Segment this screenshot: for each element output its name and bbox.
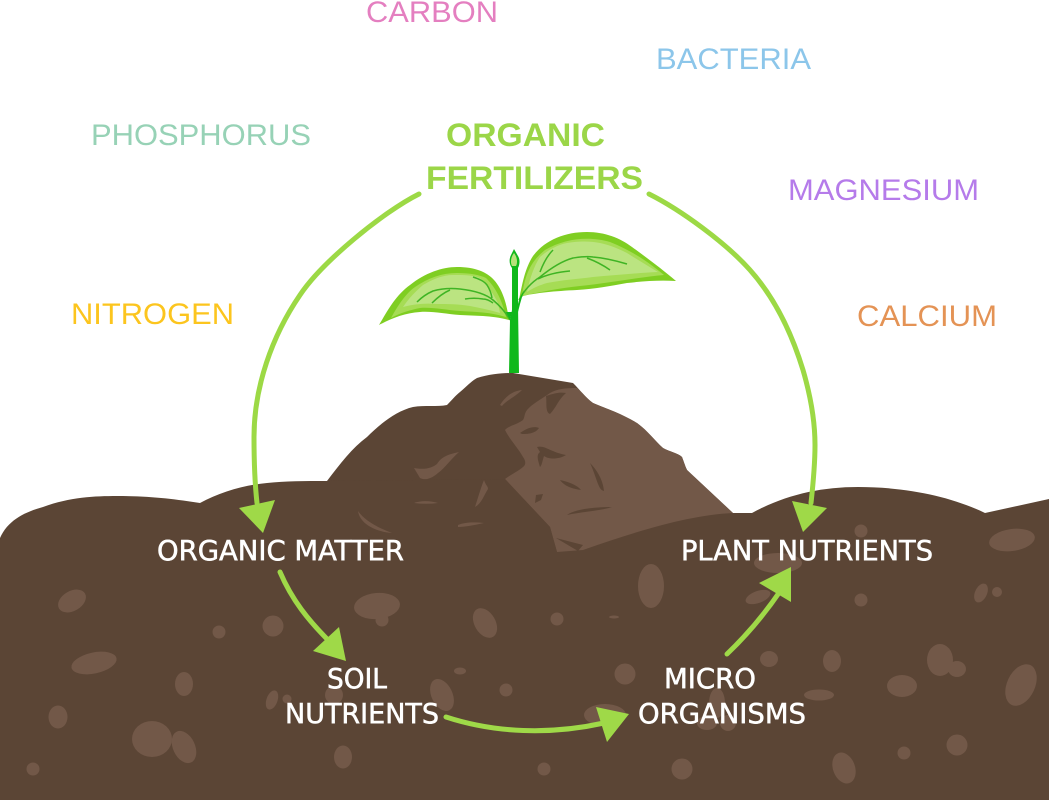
label: phosphorus: PHOSPHORUS — [91, 119, 311, 152]
arrow: fertilizers to organic matter — [239, 194, 419, 533]
cycle arrows — [239, 194, 827, 742]
label: soil nutrients: NUTRIENTS — [285, 697, 439, 730]
ground — [0, 390, 1049, 800]
label: calcium: CALCIUM — [857, 300, 997, 333]
label: micro organisms: MICRO — [664, 662, 756, 695]
label: bacteria: BACTERIA — [656, 43, 811, 76]
label: soil nutrients: SOIL — [327, 662, 387, 695]
right leaf — [519, 232, 676, 300]
title: FERTILIZERS — [426, 160, 643, 196]
arrow: soil nutrients to micro organisms — [446, 707, 629, 742]
stem and bud — [509, 249, 520, 373]
title: ORGANIC — [446, 117, 605, 153]
arrow: organic matter to soil nutrients — [280, 572, 346, 661]
stones in the soil — [26, 524, 1043, 787]
label: micro organisms: ORGANISMS — [638, 697, 806, 730]
label: plant nutrients: PLANT NUTRIENTS — [681, 534, 933, 567]
seedling — [379, 232, 676, 373]
mound shadow patches — [520, 393, 612, 551]
left leaf — [379, 267, 510, 325]
arrow: micro organisms to plant nutrients — [727, 567, 791, 654]
label: organic matter: ORGANIC MATTER — [157, 534, 404, 567]
arrow: fertilizers to plant nutrients — [649, 194, 827, 532]
branch joints — [506, 290, 524, 320]
label: nitrogen: NITROGEN — [71, 298, 234, 331]
bud tip — [511, 253, 517, 266]
soil mound behind the ground — [320, 373, 733, 560]
mound surface patches — [358, 390, 522, 533]
title — [426, 117, 643, 196]
label: soil nutrients — [285, 662, 439, 730]
label: micro organisms — [638, 662, 806, 730]
label: magnesium: MAGNESIUM — [788, 174, 979, 207]
lit side of the mound — [505, 388, 733, 560]
